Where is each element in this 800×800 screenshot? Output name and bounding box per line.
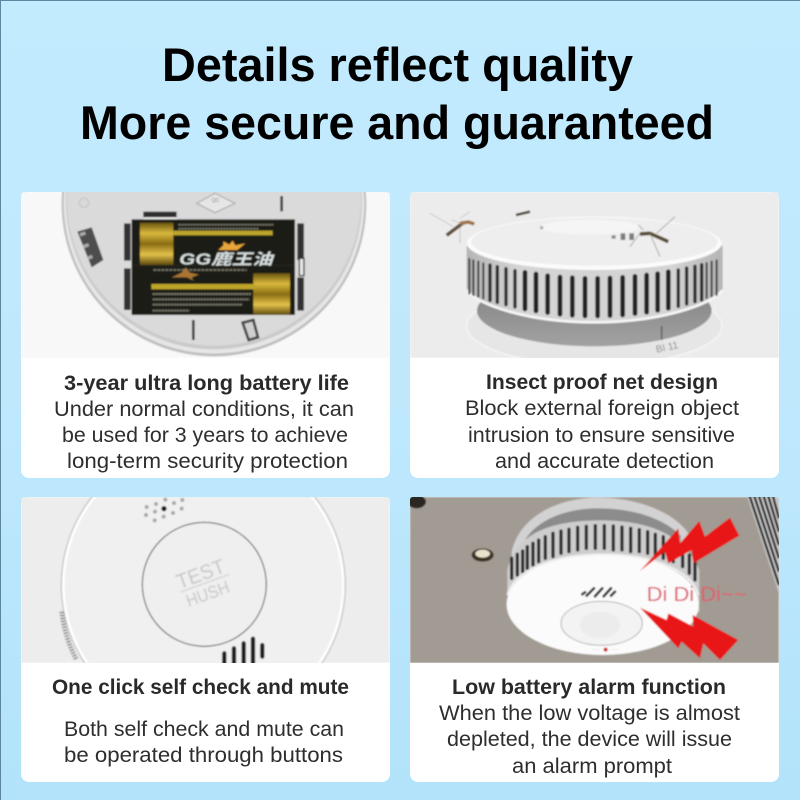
heading: Low battery alarm function [452,676,726,699]
panel: self check and mute [21,497,390,782]
description: be operated through buttons [64,744,343,767]
panel: low battery alarm [407,495,780,782]
status LED [604,648,608,652]
description: and accurate detection [495,450,714,473]
description [465,397,739,473]
title [80,38,714,149]
top cover [467,217,722,270]
alarm sound text: Di Di Di~~ [647,584,747,606]
icon: upper lightning [640,518,739,571]
base ring: BI 11 [655,340,680,356]
icon: sensor dots [144,498,184,522]
heading: Insect proof net design [486,371,718,394]
description: depleted, the device will issue [447,728,732,751]
title: More secure and guaranteed [80,96,714,149]
heading: One click self check and mute [52,676,349,699]
icon: screws [407,495,494,562]
icon: top battery: GG鹿王油 [179,251,275,269]
test button: HUSH [183,577,232,611]
test button [142,522,266,646]
description [54,398,354,473]
description: be used for 3 years to achieve [62,424,348,447]
description [439,702,740,778]
base ring [476,302,712,358]
icon: top battery [132,220,295,269]
panel: battery life [21,192,390,478]
description: Both self check and mute can [64,718,344,741]
test button: TEST [173,555,228,594]
photo: ceiling mounted alarm [407,495,780,663]
speaker slots [582,588,615,596]
description: an alarm prompt [512,755,672,778]
title: Details reflect quality [162,38,633,91]
slotted body [466,245,724,324]
panel: insect proof [410,192,779,478]
photo: detector front with button [21,497,390,663]
icon: bottom battery [132,266,295,315]
description [64,718,344,767]
button [561,601,642,645]
description: intrusion to ensure sensitive [468,424,735,447]
photo: open battery compartment: QC [212,198,220,204]
icon: mosquitoes [430,212,675,257]
photo: detector with mosquitoes [410,192,779,365]
icon: lower lightning [640,608,738,660]
description: long-term security protection [67,450,348,473]
description: Block external foreign object [465,397,739,420]
icon: speaker slots [224,639,262,666]
detector body [507,498,699,655]
description: When the low voltage is almost [439,702,740,725]
photo: open battery compartment [21,192,390,358]
description: Under normal conditions, it can [54,398,354,421]
vent grille [747,495,780,597]
heading: 3-year ultra long battery life [64,372,349,395]
